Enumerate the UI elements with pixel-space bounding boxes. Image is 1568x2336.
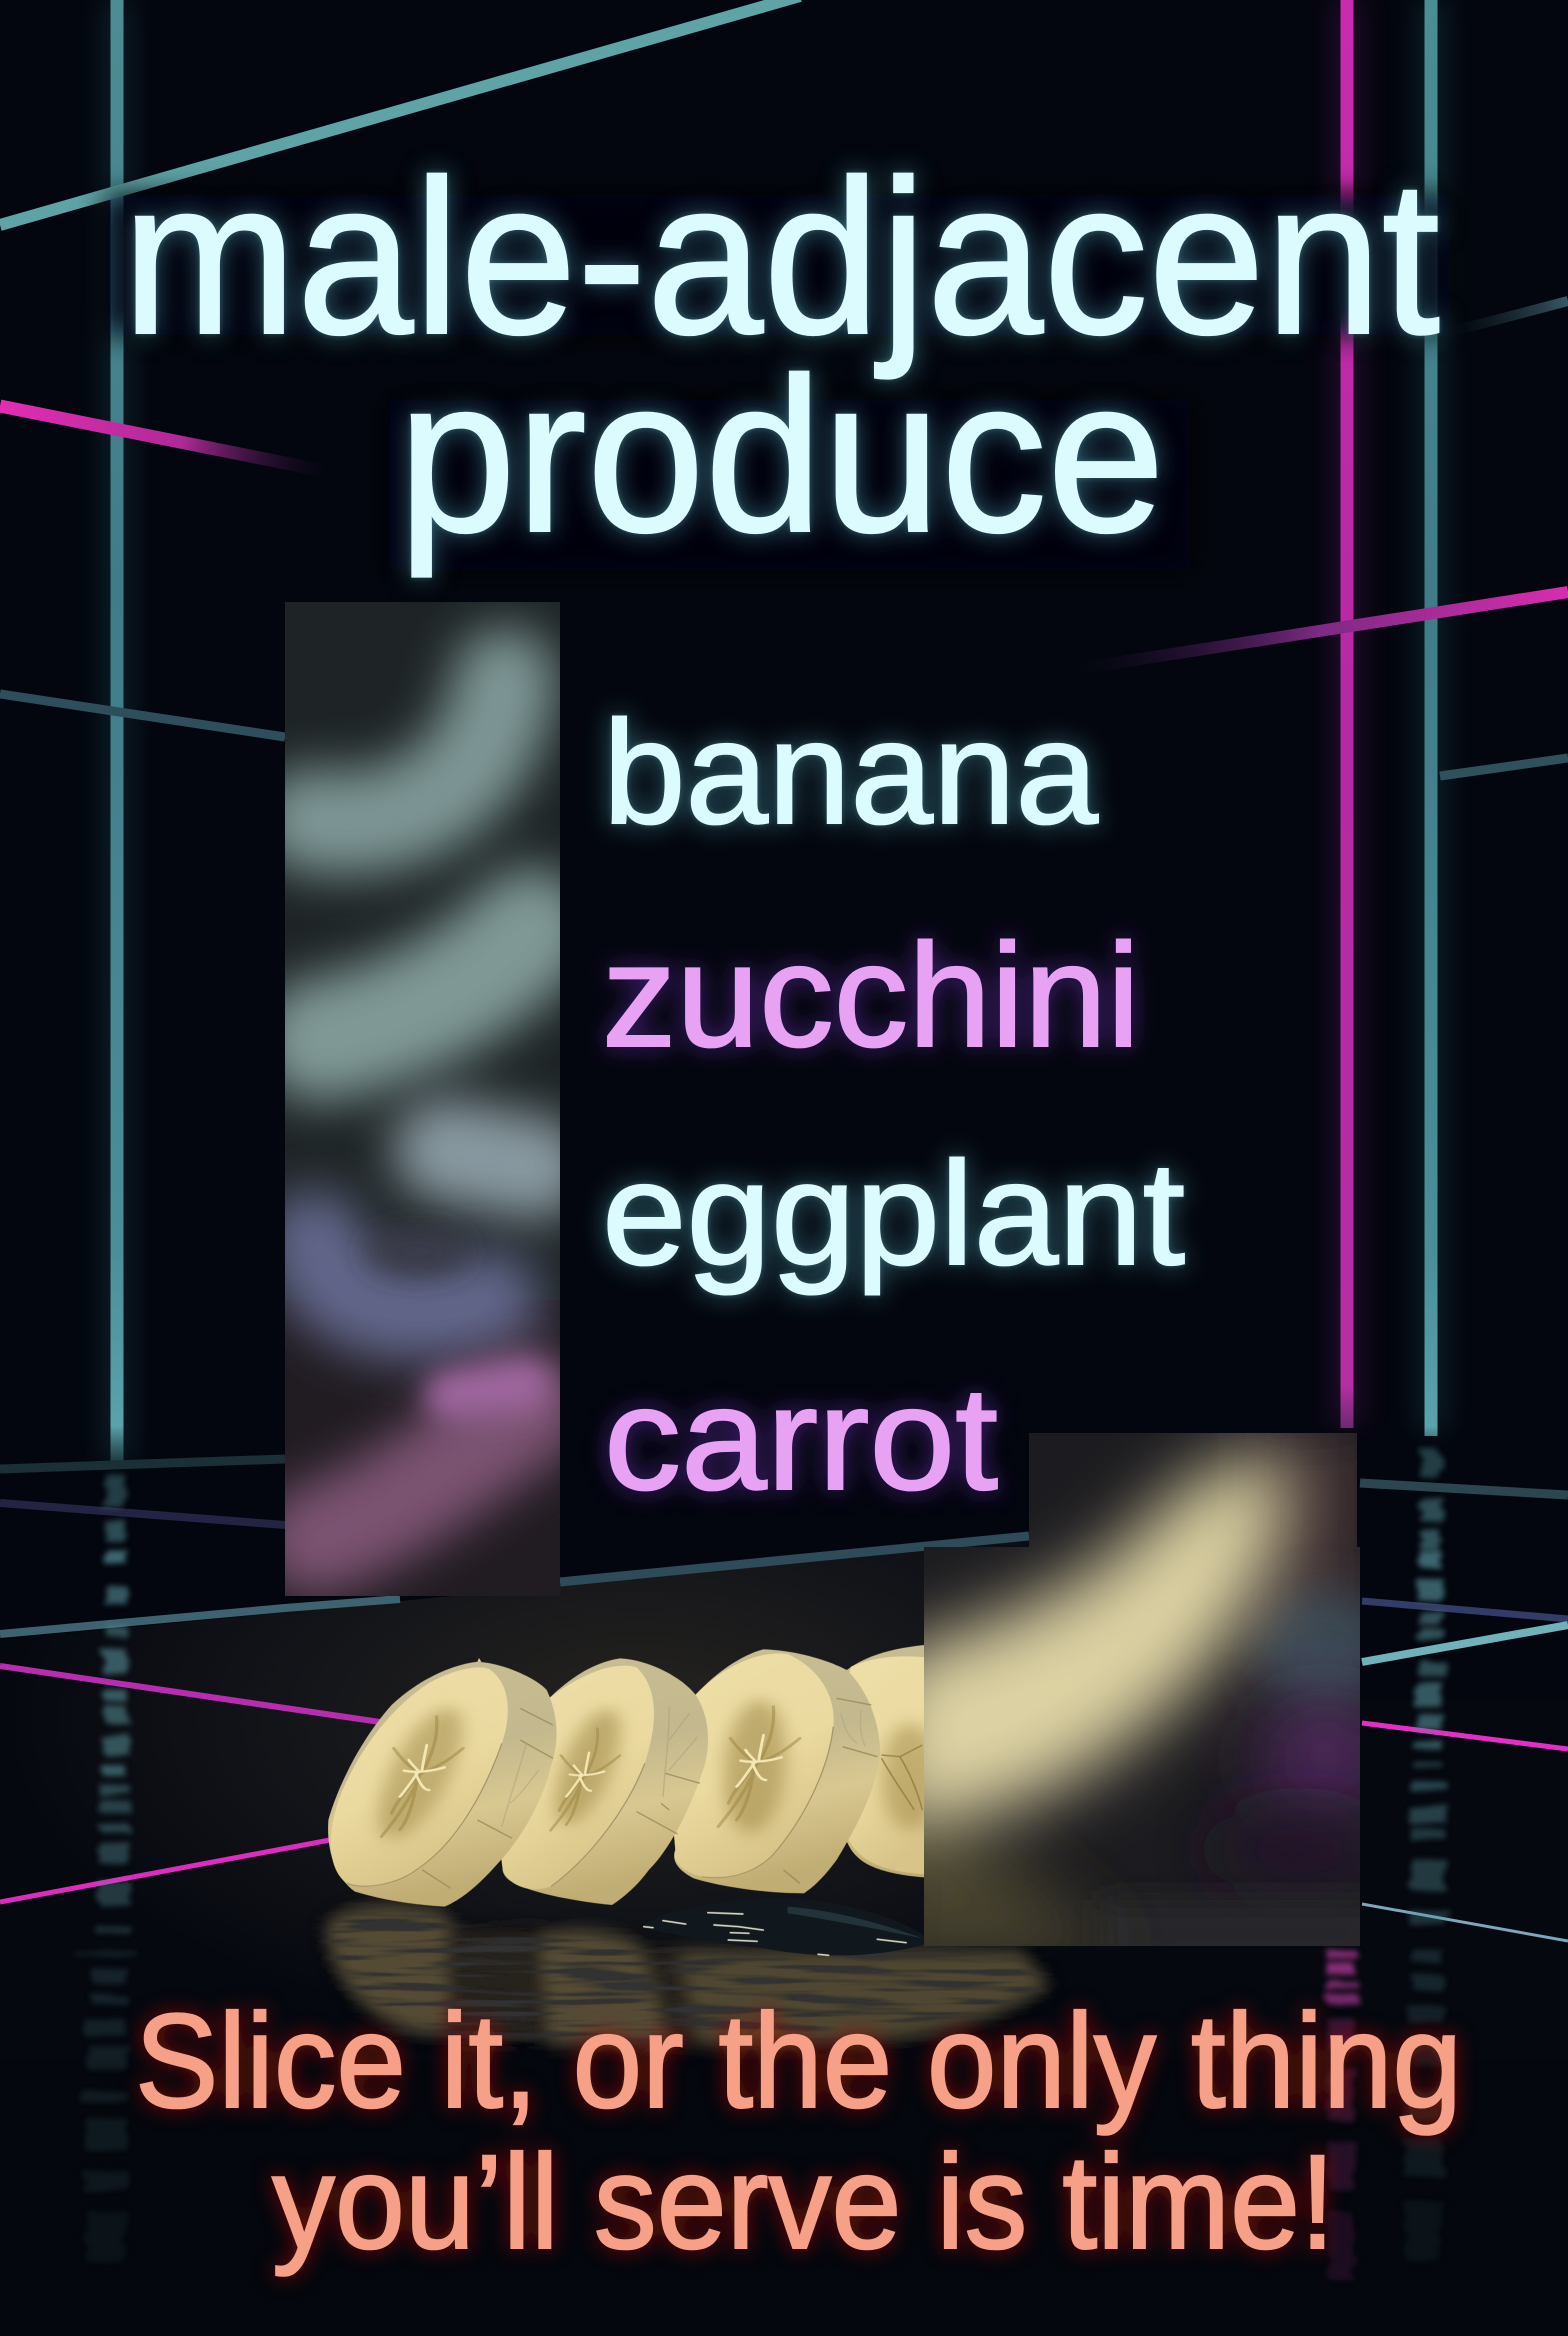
teal verticals: [117, 0, 1431, 1466]
blurred block: produce column: [285, 602, 560, 1596]
slice 4: [837, 1643, 950, 1878]
right teal reflection: [1403, 1445, 1447, 2260]
lower right lines: [1360, 1483, 1568, 1941]
title: [122, 134, 1440, 578]
item: eggplant: eggplant: [602, 1132, 1185, 1296]
left teal reflection: [75, 1478, 135, 2260]
blurred eggplant: [445, 1150, 535, 1168]
banana slices: [328, 1643, 950, 1955]
water puddle: [644, 1898, 926, 1955]
dark haze behind title and list: [105, 195, 1450, 570]
slice 3: [669, 1649, 880, 1893]
slice 2: [494, 1658, 708, 1905]
produce list: [602, 691, 1185, 1521]
slice 1: [328, 1658, 557, 1907]
floor reflections of vertical lines: [75, 1445, 1447, 2280]
line glows: [117, 0, 1432, 1460]
slogan line 2: you’ll serve is time!: [272, 2128, 1335, 2277]
magenta reflection: [1326, 1950, 1358, 2280]
blurred block: banana: [924, 1433, 1360, 1946]
title line 1: male-adjacent: [122, 134, 1440, 380]
title line 2: produce: [398, 332, 1165, 578]
item: banana: banana: [603, 691, 1098, 855]
slogan: [135, 1987, 1462, 2277]
blurred carrot: [315, 1410, 530, 1540]
item: zucchini: zucchini: [602, 914, 1140, 1078]
upper diagonals: [0, 0, 1568, 776]
item: carrot: carrot: [604, 1357, 998, 1521]
lower left lines: [0, 1459, 1029, 1902]
blurred zucchini: [320, 930, 530, 1040]
slogan line 1: Slice it, or the only thing: [135, 1987, 1462, 2136]
banana reflection on wet floor: [326, 1905, 1050, 2045]
magenta vertical: [1340, 0, 1354, 1428]
blurred banana: [310, 680, 505, 823]
